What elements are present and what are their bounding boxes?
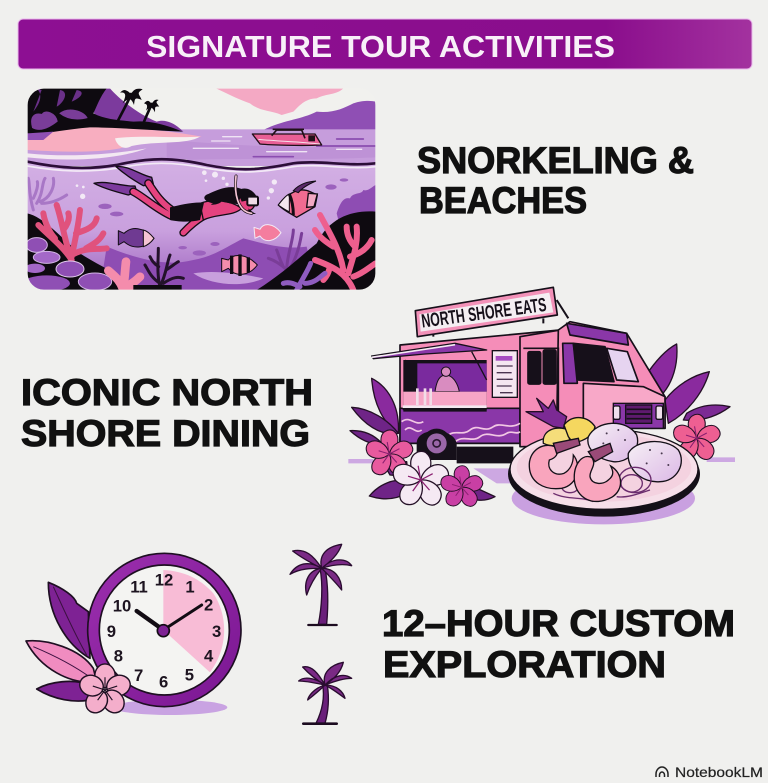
pink cloud	[216, 88, 343, 115]
clock hands	[137, 611, 163, 630]
left leaves	[350, 378, 495, 500]
clock numbers: 3	[212, 622, 221, 641]
small background fish	[98, 178, 348, 256]
right reef	[257, 211, 376, 290]
clock numbers: 1	[185, 577, 195, 596]
heading: snorkeling and beaches: BEACHES	[419, 180, 587, 221]
heading: iconic north shore dining	[21, 372, 313, 454]
underwater	[28, 161, 376, 267]
plate of shrimp and rice	[508, 418, 700, 517]
hibiscus: pink left	[364, 430, 415, 479]
body	[200, 201, 242, 220]
clock numbers: 8	[114, 647, 123, 666]
plumeria flower	[77, 664, 133, 717]
snorkel	[235, 176, 252, 213]
upper water	[27, 129, 376, 166]
boat	[252, 129, 322, 145]
clock numbers: 5	[185, 665, 194, 684]
scene corners	[27, 88, 376, 290]
panel: clock illustration	[26, 553, 241, 717]
grille	[613, 403, 663, 428]
truck wave pattern	[402, 420, 520, 443]
rice	[588, 423, 638, 462]
awning	[372, 343, 487, 359]
serving window	[403, 360, 487, 412]
arm	[179, 214, 206, 237]
clock numbers	[107, 571, 221, 692]
head	[238, 198, 255, 211]
pineapple leaves	[526, 398, 567, 428]
pink fish	[254, 225, 281, 241]
water highlights	[157, 137, 362, 160]
sky	[27, 88, 376, 132]
wheel	[417, 429, 457, 460]
purple fish	[118, 229, 154, 247]
dark seaweed	[145, 248, 183, 287]
clock numbers: 10	[113, 597, 131, 616]
bubbles	[76, 170, 277, 200]
clock numbers: 4	[204, 646, 214, 665]
hibiscus: magenta	[439, 466, 485, 509]
distant hill	[263, 101, 376, 130]
pink coral	[108, 262, 147, 290]
right coral	[315, 215, 376, 290]
island	[83, 88, 183, 132]
shaded 4 hours	[163, 570, 224, 672]
clock numbers: 9	[107, 622, 116, 641]
truck sign text: NORTH SHORE EATS	[420, 294, 548, 332]
seabed	[100, 238, 317, 290]
heading: iconic north shore dining: SHORE DINING	[21, 413, 310, 454]
purple rocks	[56, 261, 84, 277]
back leaves	[645, 344, 730, 423]
angelfish	[278, 181, 317, 217]
palm trees	[118, 94, 152, 123]
fins	[116, 166, 153, 186]
striped fish	[222, 254, 257, 276]
clock numbers: 7	[134, 666, 143, 685]
clock numbers: 12	[155, 571, 173, 590]
snorkeler	[94, 166, 258, 233]
heading: snorkeling and beaches	[417, 140, 694, 221]
heading: 12-hour custom exploration	[382, 603, 735, 685]
door	[523, 348, 558, 447]
menu board	[492, 351, 517, 397]
clock numbers: 2	[204, 596, 213, 615]
heading: 12-hour custom exploration: 12–HOUR CUSTOM	[382, 603, 735, 644]
panel: food truck illustration	[348, 287, 735, 524]
hibiscus: white center	[390, 451, 451, 509]
clock numbers: 6	[159, 673, 168, 692]
truck sign	[415, 287, 568, 337]
icon: NotebookLM logo	[656, 767, 668, 777]
hibiscus: pink right	[671, 414, 722, 463]
truck body	[400, 322, 665, 447]
clock numbers: 11	[130, 577, 148, 596]
panel: snorkeling illustration	[23, 88, 376, 291]
pineapple chunks	[543, 428, 570, 446]
heading: 12-hour custom exploration: EXPLORATION	[383, 644, 666, 685]
ground shadow	[348, 457, 735, 483]
leaves	[26, 582, 97, 701]
noodles	[553, 467, 651, 502]
clock	[88, 553, 241, 707]
title: SIGNATURE TOUR ACTIVITIES	[146, 29, 615, 64]
NotebookLM badge: NotebookLM	[675, 764, 763, 780]
back corals	[28, 178, 67, 210]
clock shadow	[113, 700, 227, 715]
hair	[204, 187, 243, 205]
heading: snorkeling and beaches: SNORKELING &	[417, 140, 694, 181]
legs	[133, 183, 172, 216]
beach	[27, 127, 202, 152]
icon: palm tree upper	[290, 544, 352, 625]
icon: palm tree lower	[299, 662, 352, 724]
bottom-left reef	[28, 214, 119, 290]
shrimp	[529, 445, 621, 501]
title banner	[18, 19, 752, 69]
mid-right weeds	[268, 230, 302, 270]
red coral left	[38, 205, 107, 260]
heading: iconic north shore dining: ICONIC NORTH	[21, 372, 313, 413]
